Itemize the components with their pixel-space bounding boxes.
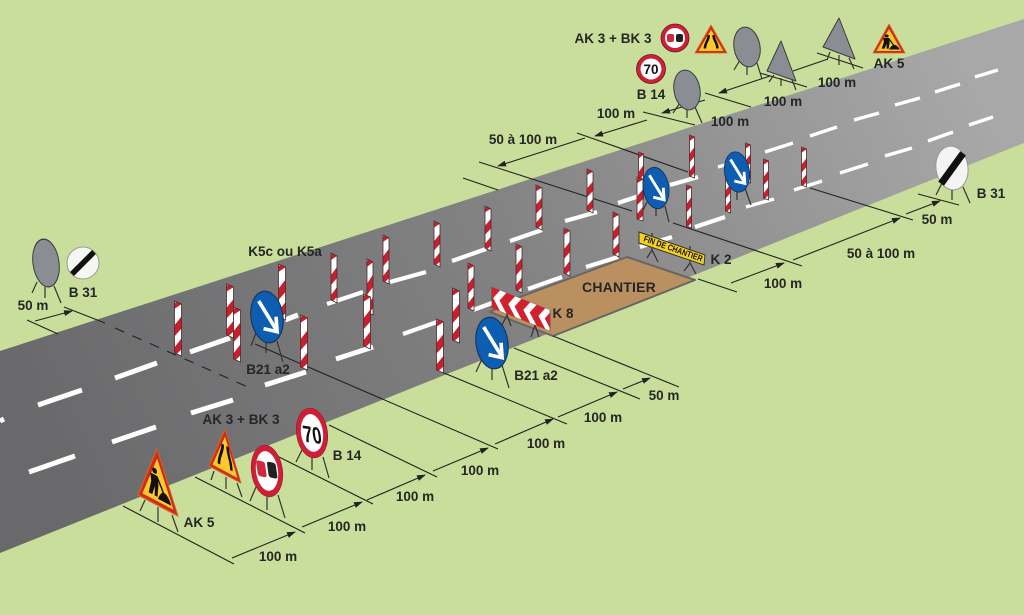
sign: B 31 end of restrictions, left [67, 247, 99, 279]
sign: B21 a2 keep right, far side 2 [722, 150, 752, 194]
distance labels: 50 à 100 m [489, 132, 557, 147]
work zone: chantier ground [490, 257, 695, 336]
sign labels: B 14 [333, 448, 362, 463]
sign labels: B 31 [69, 285, 98, 300]
sign: B21 a2 keep right, second [473, 315, 511, 371]
distance labels [18, 75, 952, 564]
sign back: far ellipse 2 [731, 25, 763, 69]
legend icon: B 14 [636, 54, 666, 84]
sign: B 31 end of restrictions, right [933, 144, 971, 192]
legend icon: AK 5 [873, 24, 905, 53]
road lane markings [0, 70, 998, 472]
sign: AK 5 roadworks, near [137, 438, 178, 516]
sign labels: B21 a2 [246, 362, 290, 377]
legend icon: AK 3 [695, 25, 727, 53]
sign: BK 3 no overtaking, near [248, 443, 286, 499]
sign labels: B21 a2 [514, 368, 558, 383]
sign back: far triangle 1 [767, 41, 796, 81]
distance labels: 100 m [597, 106, 635, 121]
label: chantier: CHANTIER [582, 279, 656, 295]
distance labels: 100 m [259, 549, 297, 564]
sign back: far ellipse 1 [671, 68, 703, 112]
distance labels: 100 m [764, 276, 802, 291]
sign labels [69, 31, 1006, 530]
sign labels: AK 5 [184, 515, 215, 530]
sign labels: B 31 [977, 186, 1006, 201]
sign back: left rear [30, 237, 62, 289]
distance labels: 100 m [461, 463, 499, 478]
sign: K 8 chevron barrier [486, 285, 560, 335]
sign labels: AK 3 + BK 3 [203, 412, 280, 427]
sign: B21 a2 keep right, first [248, 289, 286, 345]
distance labels: 100 m [328, 519, 366, 534]
sign: K 2 fin de chantier barrier [639, 232, 705, 265]
sign labels: B 14 [637, 87, 666, 102]
sign: AK 3 road narrowing, near [209, 420, 241, 483]
distance labels: 50 m [649, 388, 679, 403]
distance labels: 100 m [584, 410, 622, 425]
k2 sign text: FIN DE CHANTIER [642, 233, 704, 264]
sign back: far triangle 2 [823, 18, 855, 59]
sign: B 14 speed limit 70, near [293, 406, 331, 460]
legend icon: B 14: 70 [643, 62, 659, 77]
K5 delineator posts [174, 135, 806, 373]
sign labels: K 2 [710, 252, 732, 267]
distance labels: 50 m [922, 212, 952, 227]
distance labels: 100 m [527, 436, 565, 451]
distance labels: 100 m [818, 75, 856, 90]
sign labels: AK 3 + BK 3 [575, 31, 652, 46]
sign labels: K5c ou K5a [248, 244, 322, 259]
sign legs [32, 52, 970, 532]
distance labels: 100 m [764, 94, 802, 109]
distance labels: 100 m [396, 489, 434, 504]
legend icon: BK 3 [661, 24, 689, 52]
distance labels: 50 m [18, 298, 48, 313]
measurement lines and distance arrows [27, 53, 959, 564]
sign: B21 a2 keep right, far side 1 [640, 166, 672, 210]
sign labels: AK 5 [874, 56, 905, 71]
distance labels: 100 m [711, 114, 749, 129]
sign labels: K 8 [552, 306, 574, 321]
sign: B 14 speed limit 70, near: 70 [301, 421, 323, 450]
distance labels: 50 à 100 m [847, 246, 915, 261]
